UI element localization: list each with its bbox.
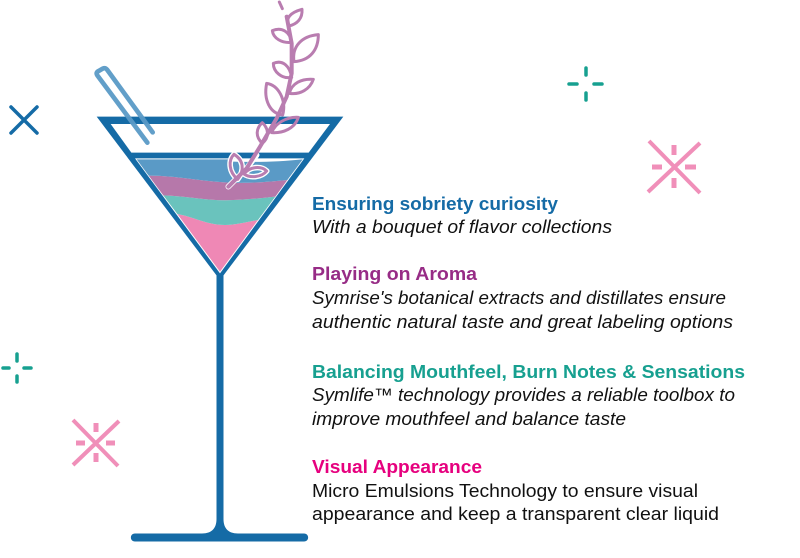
icon: herb sprig [228, 2, 318, 187]
liquid layer: teal [163, 195, 275, 225]
text block: sobriety curiosity [312, 194, 612, 237]
liquid layer: blue [137, 159, 303, 183]
icon: straw [97, 68, 153, 143]
text block: visual appearance [312, 457, 719, 524]
body text line 2: appearance and keep a transparent clear liquid [312, 504, 719, 524]
heading: Balancing Mouthfeel, Burn Notes & Sensations [312, 362, 745, 382]
icon: pink star left [73, 420, 119, 466]
body text line 2: authentic natural taste and great labeling options [312, 312, 733, 332]
body text: With a bouquet of flavor collections [312, 217, 612, 237]
heading: Playing on Aroma [312, 264, 478, 284]
icon: glass bowl outline [97, 117, 343, 280]
liquid layer: purple [149, 176, 287, 200]
icon: pink star right [648, 141, 700, 193]
liquid layers [137, 159, 303, 272]
heading: Visual Appearance [312, 457, 482, 477]
body text: Micro Emulsions Technology to ensure visual [312, 481, 698, 501]
body text: Symlife™ technology provides a reliable toolbox to [312, 385, 735, 405]
icon: teal sparkle left [3, 354, 31, 382]
liquid layer: pink [177, 214, 258, 272]
body text: Symrise's botanical extracts and distillates ensure [312, 288, 726, 308]
body text line 2: improve mouthfeel and balance taste [312, 409, 626, 429]
text block: mouthfeel [312, 362, 745, 429]
icon: teal sparkle top right [569, 68, 602, 100]
cocktail glass illustration [97, 2, 343, 541]
icon: blue cross [11, 107, 37, 133]
text block: aroma [312, 264, 733, 332]
heading: Ensuring sobriety curiosity [312, 194, 558, 214]
icon: glass stem and foot [131, 272, 308, 542]
